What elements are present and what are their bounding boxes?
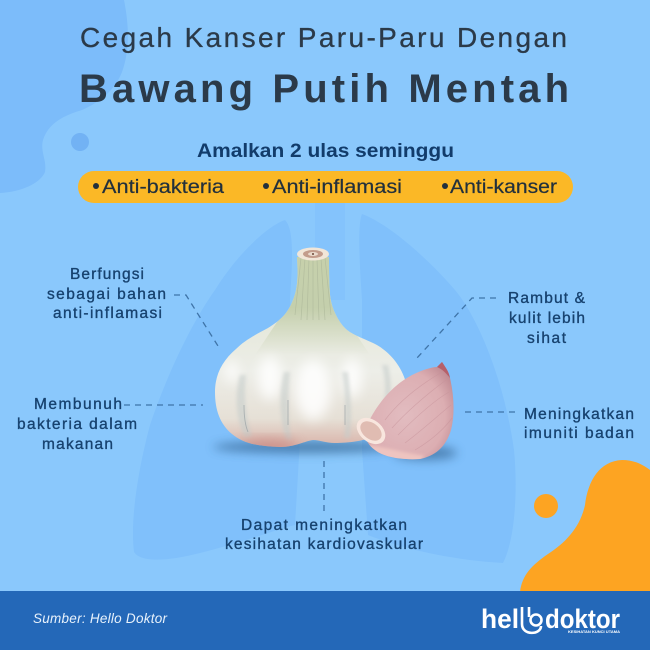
callout: rambut dan kulit lebih sihat: Rambut &	[508, 290, 586, 307]
logo: hellodoktor: KESIHATAN KUNCI UTAMA	[568, 629, 620, 634]
callout: berfungsi sebagai bahan anti-inflamasi: Berfungsi	[70, 266, 144, 283]
callout: rambut dan kulit lebih sihat: sihat	[527, 330, 567, 347]
callout: kesihatan kardiovaskular: Dapat meningkatkan	[241, 517, 407, 534]
source text: Sumber: Hello Doktor	[33, 611, 168, 626]
shadow	[213, 441, 457, 460]
benefits pill	[78, 171, 573, 203]
bullet: anti-kanser: Anti-kanser	[450, 177, 558, 198]
callout: kesihatan kardiovaskular	[225, 461, 423, 553]
garlic clove	[356, 362, 454, 460]
bullet: anti-inflamasi: Anti-inflamasi	[272, 177, 402, 198]
title line 1: Cegah Kanser Paru-Paru Dengan	[80, 22, 567, 53]
callout: membunuh bakteria dalam makanan: makanan	[42, 436, 113, 453]
garlic bulb	[215, 250, 408, 455]
callout: berfungsi sebagai bahan anti-inflamasi: anti-inflamasi	[53, 305, 162, 322]
callout: membunuh bakteria dalam makanan: Membunuh	[34, 396, 122, 413]
logo: hellodoktor: hel	[481, 604, 519, 634]
decorative blob: top left	[0, 0, 128, 193]
footer bar	[0, 591, 650, 650]
title	[79, 22, 569, 111]
callout: kesihatan kardiovaskular: kesihatan kardiovaskular	[225, 536, 423, 553]
callout: membunuh bakteria dalam makanan	[17, 396, 203, 453]
subtitle: Amalkan 2 ulas seminggu	[197, 140, 454, 162]
callout: rambut dan kulit lebih sihat	[417, 290, 586, 358]
garlic illustration	[213, 248, 457, 466]
logo: hellodoktor	[481, 604, 620, 634]
bullet: anti-bakteria: Anti-bakteria	[102, 177, 224, 198]
title line 2: Bawang Putih Mentah	[79, 67, 569, 111]
callout: membunuh bakteria dalam makanan: bakteria dalam	[17, 416, 137, 433]
callout: berfungsi sebagai bahan anti-inflamasi	[47, 266, 218, 346]
logo: hellodoktor: doktor	[545, 604, 620, 634]
decorative orange blob	[520, 460, 650, 592]
callout: berfungsi sebagai bahan anti-inflamasi: sebagai bahan	[47, 286, 166, 303]
lungs illustration	[133, 200, 516, 563]
callout: meningkatkan imuniti badan	[465, 406, 634, 442]
stem top	[297, 248, 329, 260]
callout: rambut dan kulit lebih sihat: kulit lebih	[509, 310, 585, 327]
callout: meningkatkan imuniti badan: Meningkatkan	[524, 406, 634, 423]
callout: meningkatkan imuniti badan: imuniti badan	[524, 425, 634, 442]
